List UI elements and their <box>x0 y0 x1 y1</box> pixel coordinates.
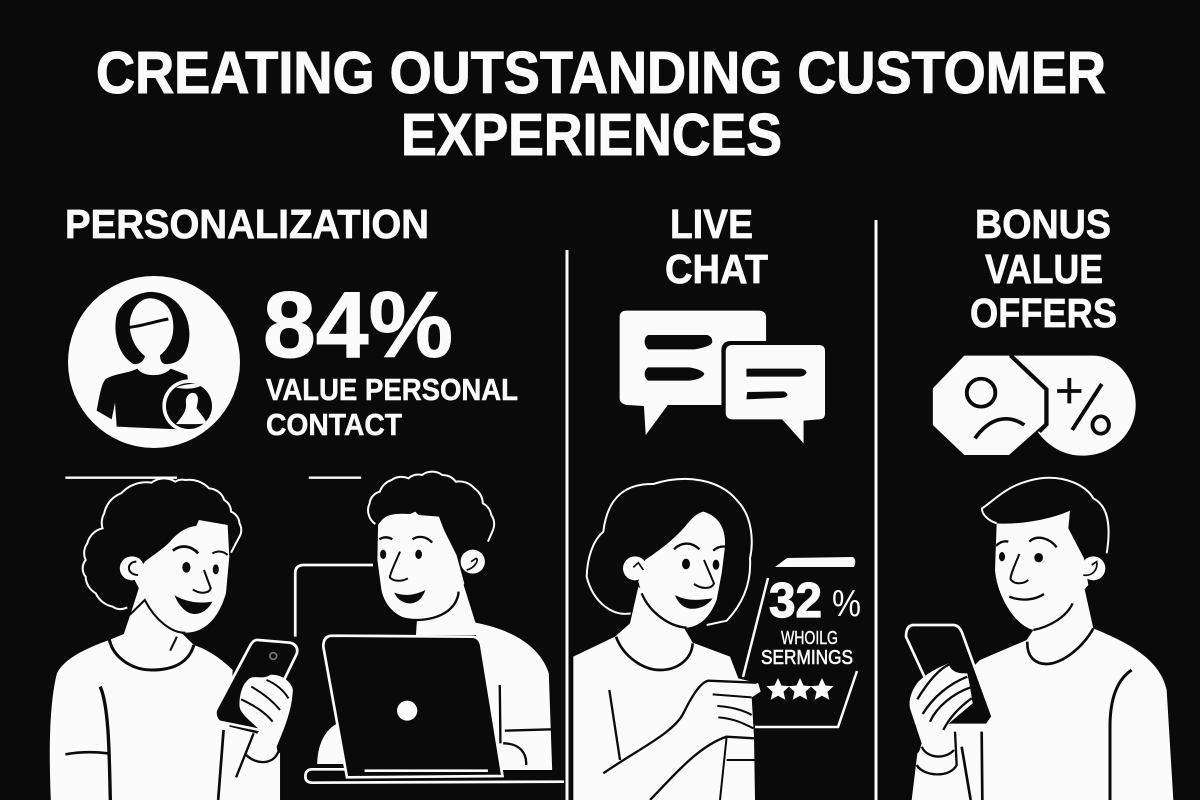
heading: bonus value offers: VALUE <box>985 246 1103 292</box>
card: 32% review stat <box>743 557 861 727</box>
icon: personal contact avatar <box>68 276 240 448</box>
heading: bonus value offers: OFFERS <box>970 290 1117 336</box>
title: CREATING OUTSTANDING CUSTOMER <box>96 40 1106 106</box>
illustration: man with phone <box>906 478 1173 800</box>
illustration: woman with review card <box>573 479 761 800</box>
heading: live chat: CHAT <box>665 246 768 292</box>
illustration: man with laptop <box>295 472 564 783</box>
title <box>96 40 1106 168</box>
illustration: woman with phone <box>50 478 297 800</box>
stat: 84% value personal contact: VALUE PERSONAL <box>266 372 518 407</box>
card: 32% review stat: 32 <box>769 574 822 628</box>
card: 32% review stat: SERMINGS <box>761 647 853 669</box>
heading: live chat <box>665 201 768 292</box>
card: 32% review stat: WHOILG <box>781 628 838 648</box>
stat: 84% value personal contact: 84% <box>263 272 453 377</box>
heading: bonus value offers: BONUS <box>975 201 1111 247</box>
icon: chat bubbles <box>620 311 829 443</box>
heading: bonus value offers <box>970 201 1117 336</box>
stat: 84% value personal contact <box>263 272 518 442</box>
card: 32% review stat: % <box>832 583 861 625</box>
stat: 84% value personal contact: CONTACT <box>266 407 402 442</box>
heading: personalization: PERSONALIZATION <box>65 201 429 247</box>
title: EXPERIENCES <box>401 102 782 168</box>
heading: live chat: LIVE <box>670 201 753 247</box>
icon: bonus offer badge <box>933 356 1136 456</box>
